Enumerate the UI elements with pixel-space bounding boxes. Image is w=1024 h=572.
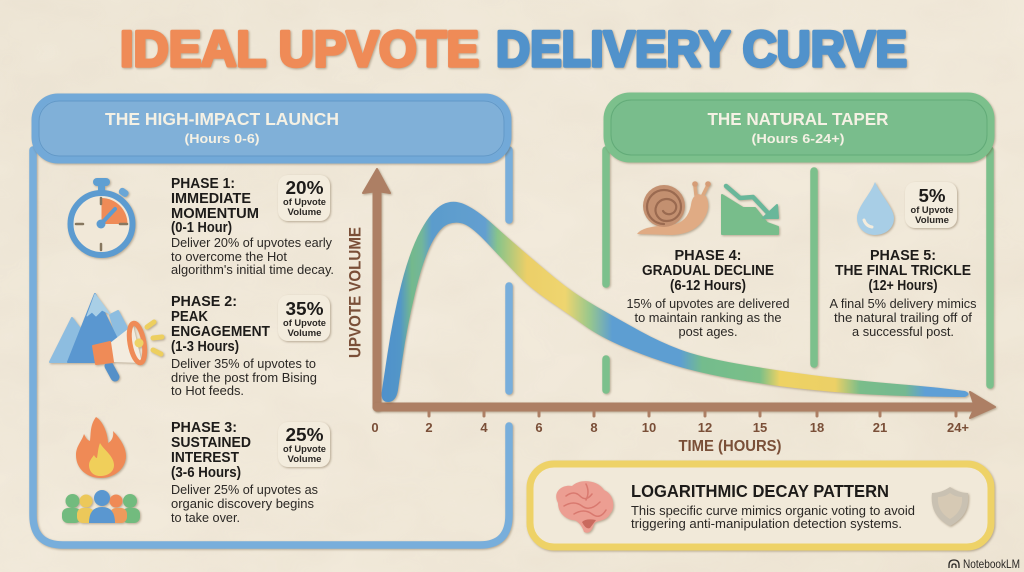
badge: 35% [278,295,330,341]
phase 1 text: IMMEDIATE [171,191,251,207]
badge: 5%: Volume [915,215,949,226]
phase 2 text: PHASE 2: [171,294,237,310]
description: This specific curve mimics organic voting to avoid [631,504,915,518]
x axis numbers: 8 [590,420,598,435]
icon: shield [932,487,968,526]
phase 1 text: Deliver 20% of upvotes early [171,236,333,250]
badge: 20% [278,175,330,221]
header banner: (Hours 0-6) [184,132,260,146]
title [120,21,907,77]
y axis arrow [363,169,390,407]
description [631,504,915,531]
x axis numbers: 24+ [947,420,969,435]
phase 1 text: PHASE 1: [171,176,235,192]
panel: the high-impact launch [33,97,509,545]
icon: snail [637,181,711,235]
x axis numbers: 18 [810,420,824,435]
badge: 20%: Volume [288,207,322,218]
x axis numbers: 12 [698,420,712,435]
header banner [607,96,991,159]
phase 4 text [626,248,790,339]
badge: 25%: of Upvote [283,444,326,455]
phase 2 text: PEAK [171,309,208,325]
phase 3 text: PHASE 3: [171,420,237,436]
phase 1 text: to overcome the Hot [171,250,288,264]
header banner: (Hours 6-24+) [752,132,844,146]
badge: 25%: Volume [288,454,322,465]
badge: 5%: 5% [918,186,946,206]
heading: LOGARITHMIC DECAY PATTERN [631,481,889,501]
phase 5 text: PHASE 5: [870,248,936,264]
phase 5 text: THE FINAL TRICKLE [835,263,971,279]
x axis numbers: 4 [480,420,488,435]
x axis numbers: 10 [642,420,656,435]
phase 4 text: post ages. [678,325,738,339]
phase 2 text: Deliver 35% of upvotes to [171,357,316,371]
phase 2 text: drive the post from Bising [171,371,317,385]
icon: mountain and megaphone [50,294,162,377]
badge: 25% [278,422,330,467]
icon: flame [76,417,126,478]
description: triggering anti-manipulation detection systems. [631,517,902,531]
icon: group of people [62,490,140,523]
phase 4 text: GRADUAL DECLINE [642,263,774,279]
y axis label: UPVOTE VOLUME [346,227,364,358]
title: IDEAL UPVOTE [120,21,479,77]
panel: the natural taper [606,96,991,390]
chart: upvote delivery curve [346,169,995,455]
phase 3 text: to take over. [171,511,240,525]
phase 5 text [830,248,976,339]
phase 3 text: SUSTAINED [171,435,251,451]
phase 3 text: (3-6 Hours) [171,465,241,481]
curve ribbon [382,202,969,402]
phase 4 text: (6-12 Hours) [670,278,746,294]
phase 3 text: Deliver 25% of upvotes as [171,483,318,497]
x axis numbers: 6 [535,420,543,435]
phase 4 text: PHASE 4: [674,248,742,264]
badge: 35%: Volume [288,328,322,339]
badge: 5% [905,182,957,228]
title: DELIVERY CURVE [496,21,907,77]
x axis numbers: 15 [753,420,767,435]
icon: stopwatch [70,178,132,255]
badge: 20%: of Upvote [283,197,326,208]
phase 5 text: the natural trailing off of [834,311,973,325]
phase 5 text: (12+ Hours) [868,278,938,294]
icon: water drop [857,182,894,235]
x axis numbers: 2 [425,420,433,435]
badge: 25%: 25% [286,425,324,445]
phase 1 text: algorithm's initial time decay. [171,263,334,277]
callout frame [530,464,991,547]
header banner: THE HIGH-IMPACT LAUNCH [105,109,339,129]
header banner [35,97,508,160]
badge: 5%: of Upvote [910,205,954,216]
phase 4 text: to maintain ranking as the [634,311,782,325]
phase 1 text: MOMENTUM [171,206,259,222]
header banner: THE NATURAL TAPER [708,109,889,129]
phase 5 text: a successful post. [852,325,954,339]
phase 1 text [171,176,334,277]
badge: 35%: of Upvote [283,318,326,329]
phase 2 text: to Hot feeds. [171,384,244,398]
phase 3 text: organic discovery begins [171,497,314,511]
x axis label: TIME (HOURS) [678,438,782,455]
phase 5 text: A final 5% delivery mimics [830,297,976,311]
phase 3 text [171,420,318,525]
badge: 35%: 35% [286,299,324,319]
phase 2 text: (1-3 Hours) [171,339,239,355]
phase 1 text: (0-1 Hour) [171,220,232,236]
x axis numbers: 21 [873,420,887,435]
x axis arrow [377,392,995,418]
phase 2 text: ENGAGEMENT [171,324,270,340]
phase 2 text [171,294,317,398]
callout: logarithmic decay pattern [530,464,991,547]
phase 4 text: 15% of upvotes are delivered [626,297,790,311]
x axis ticks [429,412,956,416]
badge: 20%: 20% [286,178,324,198]
panel outline [606,150,990,390]
x axis numbers [371,420,969,435]
panel outline [33,150,509,545]
x axis numbers: 0 [371,420,379,435]
phase 3 text: INTEREST [171,450,239,466]
icon: brain [556,481,613,533]
icon: declining chart [722,186,778,234]
